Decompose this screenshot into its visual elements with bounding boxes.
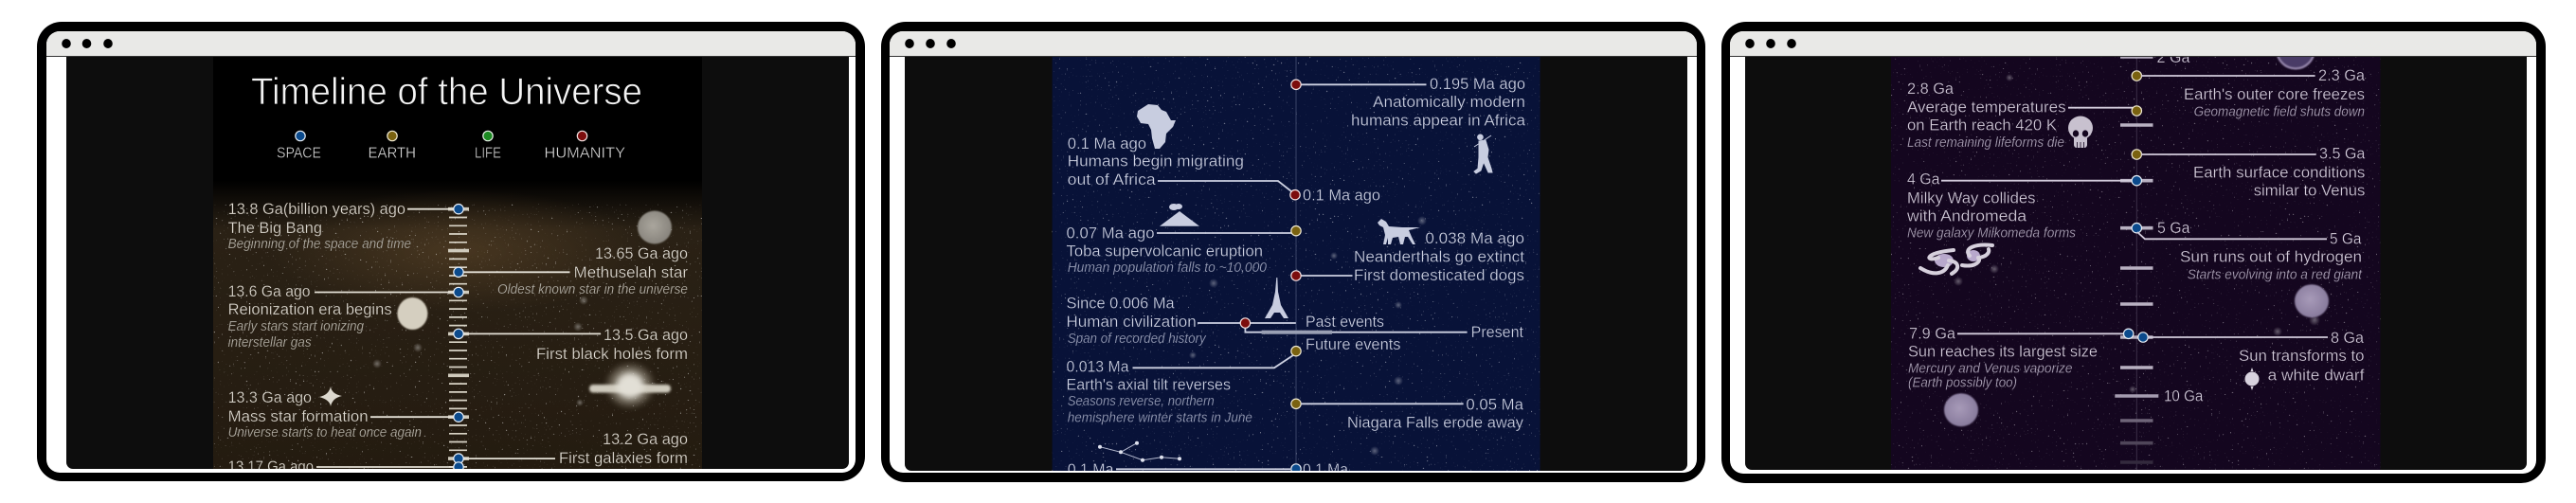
event: axial tilt: [1067, 347, 1301, 426]
event: Niagara Falls: Niagara Falls erode away: [1347, 414, 1523, 432]
legend: HUMANITY: [544, 146, 625, 162]
event: Reionization era: interstellar gas: [228, 335, 312, 350]
event: Sun runs out of hydrogen: Starts evolving into a red giant: [2188, 267, 2363, 282]
icon: Eiffel tower: [1265, 278, 1288, 318]
event: average temperatures: on Earth reach 420 K: [1907, 117, 2058, 135]
event: outer core freezes: Earth's outer core freezes: [2184, 85, 2365, 103]
event: outer core freezes: Geomagnetic field shuts down: [2194, 105, 2365, 120]
event: surface like Venus: 3.5 Ga: [2319, 144, 2366, 162]
icon: four-point star: [319, 386, 342, 406]
event: The Big Bang: Beginning of the space and time: [228, 237, 411, 252]
event: Sun runs out of hydrogen: 5 Ga: [2157, 219, 2190, 237]
planet: red giant Sun: [2295, 284, 2329, 317]
page screenshot 2: [905, 57, 1687, 478]
event: Reionization era: [228, 282, 463, 350]
event: average temperatures: Last remaining lifeforms die: [1907, 135, 2064, 151]
event: Neanderthals extinct and dogs: Neanderthals go extinct: [1354, 248, 1524, 266]
event: average temperatures: [1907, 80, 2141, 151]
event: modern humans: [1291, 75, 1526, 130]
timeline axis with tick marks: [448, 209, 469, 467]
event: Human civilization and present marker: Human civilization: [1067, 313, 1197, 331]
event: Human civilization and present marker: Future events: [1306, 335, 1400, 353]
event: Sun largest size: (Earth possibly too): [1908, 376, 2017, 391]
event: Milky Way collision: Milky Way collides: [1907, 189, 2035, 207]
event: Toba eruption: Toba supervolcanic eruption: [1067, 243, 1263, 260]
legend: SPACE: [277, 146, 321, 162]
event: migration out of Africa: 0.1 Ma ago: [1303, 187, 1380, 205]
icon: volcano: [1160, 204, 1199, 226]
icon: white dwarf star: [2245, 368, 2259, 390]
event: axial tilt: 0.013 Ma: [1067, 358, 1129, 376]
event: axial tilt: Earth's axial tilt reverses: [1067, 376, 1231, 394]
timeline axis: [1296, 57, 1297, 464]
event: migration out of Africa: [1068, 135, 1380, 205]
event: First galaxies: 13.2 Ga ago: [603, 430, 688, 448]
label: 2 Ga, clipped: 2 Ga: [2156, 48, 2190, 66]
timeline axis with tick marks: [2115, 57, 2158, 470]
planet: reionization body: [397, 297, 427, 330]
event: The Big Bang: [228, 200, 463, 252]
legend: EARTH: [368, 146, 416, 162]
event: Milky Way collision: 4 Ga: [1907, 170, 1940, 188]
window frame 3: [1721, 22, 2546, 483]
event: Toba eruption: Human population falls to ~10,000: [1068, 260, 1267, 276]
event: 13.17 Ga, clipped: [229, 460, 464, 469]
icon: dog: [1378, 219, 1420, 244]
event: migration out of Africa: out of Africa: [1068, 171, 1156, 189]
event: First galaxies: [453, 434, 688, 466]
event: Milky Way collision: with Andromeda: [1906, 207, 2027, 225]
title: Timeline of the Universe: [251, 71, 642, 113]
event: Reionization era: 13.6 Ga ago: [228, 282, 311, 300]
event: migration out of Africa: Humans begin migrating: [1068, 153, 1244, 171]
event: surface like Venus: [2132, 144, 2366, 200]
event: Human civilization and present marker: Past events: [1306, 313, 1384, 331]
page screenshot 1: [66, 57, 849, 476]
event: Methuselah star: Methuselah star: [574, 263, 688, 281]
planet: bloated Sun: [1944, 393, 1978, 426]
event: Mass star formation: 13.3 Ga ago: [228, 388, 312, 406]
event: First black holes: 13.5 Ga ago: [603, 326, 688, 344]
legend: LIFE: [475, 146, 501, 162]
planet: early moon-like body: [638, 210, 672, 244]
event: modern humans: humans appear in Africa: [1351, 112, 1526, 130]
event: Human civilization and present marker: Since 0.006 Ma: [1067, 295, 1175, 313]
event: Mass star formation: Mass star formation: [228, 407, 369, 425]
event: Sun largest size: Sun reaches its largest size: [1908, 343, 2098, 361]
event: Toba eruption: [1067, 225, 1301, 276]
event: Toba eruption: 0.07 Ma ago: [1067, 225, 1154, 243]
event: The Big Bang: The Big Bang: [228, 219, 322, 237]
event: Mass star formation: Universe starts to heat once again: [228, 425, 422, 440]
event: Methuselah star: Oldest known star in the universe: [497, 282, 688, 297]
event: Niagara Falls: [1290, 398, 1523, 431]
event: Sun becomes white dwarf: Sun transforms to: [2239, 347, 2365, 365]
event: Sun becomes white dwarf: a white dwarf: [2268, 367, 2365, 385]
event: axial tilt: hemisphere winter starts in June: [1068, 411, 1252, 426]
event: surface like Venus: Earth surface conditions: [2193, 163, 2365, 181]
icon: galaxy: [589, 365, 671, 406]
event: Neanderthals extinct and dogs: [1291, 229, 1524, 284]
legend: [277, 131, 625, 157]
event: Milky Way collision: [1906, 170, 2141, 242]
event: Mass star formation: [228, 388, 463, 440]
event: average temperatures: 2.8 Ga: [1907, 80, 1955, 98]
icon: skull: [2068, 116, 2093, 148]
page screenshot 3: [1745, 30, 2527, 470]
event: Reionization era: Reionization era begins: [228, 300, 392, 318]
window frame 2: [881, 22, 1705, 482]
window frame 1: [37, 22, 865, 481]
event: modern humans: 0.195 Ma ago: [1430, 75, 1525, 93]
event: Sun becomes white dwarf: [2138, 329, 2365, 385]
event: Niagara Falls: 0.05 Ma: [1466, 395, 1524, 413]
event: Sun becomes white dwarf: 8 Ga: [2331, 329, 2365, 347]
event: Methuselah star: 13.65 Ga ago: [595, 244, 688, 262]
event: Sun largest size: [1908, 324, 2134, 391]
event: modern humans: Anatomically modern: [1373, 93, 1525, 111]
event: outer core freezes: [2132, 66, 2366, 120]
event: Sun largest size: Mercury and Venus vaporize: [1908, 361, 2073, 376]
event: 13.17 Ga, clipped: 13.17 Ga ago: [228, 458, 314, 476]
icon: Africa: [1137, 104, 1176, 149]
event: Sun runs out of hydrogen: [2132, 219, 2363, 282]
event: axial tilt: Seasons reverse, northern: [1068, 394, 1215, 409]
event: 0.1 Ma future, clipped: 0.1 Ma: [1068, 460, 1114, 478]
icon: colliding spiral galaxies: [1920, 245, 1992, 274]
panel: browser window 3, far future: [1721, 22, 2546, 483]
event: Neanderthals extinct and dogs: 0.038 Ma ago: [1425, 229, 1524, 247]
event: outer core freezes: 2.3 Ga: [2318, 66, 2366, 84]
event: Human civilization and present marker: Present: [1471, 323, 1523, 341]
event: First black holes: First black holes form: [536, 345, 688, 363]
event: Sun largest size: 7.9 Ga: [1909, 324, 1956, 342]
panel: browser window 2, human era: [881, 22, 1705, 482]
event: Methuselah star: [453, 248, 688, 294]
event: Reionization era: Early stars start ionizing: [228, 319, 364, 334]
event: 0.1 Ma future, clipped: 0.1 Ma: [1303, 460, 1348, 478]
event: Neanderthals extinct and dogs: First domesticated dogs: [1354, 266, 1524, 284]
planet: purple, clipped: [2276, 57, 2315, 70]
event: 0.1 Ma future, clipped: [1068, 463, 1347, 471]
icon: constellation: [1098, 441, 1181, 462]
event: average temperatures: Average temperatures: [1907, 98, 2066, 116]
event: Sun runs out of hydrogen: Sun runs out of hydrogen: [2180, 248, 2362, 266]
event: Human civilization and present marker: Span of recorded history: [1068, 332, 1206, 347]
panel: browser window 1, start of the timeline: [37, 22, 865, 481]
event: migration out of Africa: 0.1 Ma ago: [1068, 135, 1146, 153]
event: surface like Venus: similar to Venus: [2254, 182, 2365, 200]
event: Milky Way collision: New galaxy Milkomeda forms: [1907, 226, 2076, 242]
event: First galaxies: First galaxies form: [559, 449, 688, 467]
event: Human civilization and present marker: [1067, 297, 1523, 350]
icon: walking human: [1474, 135, 1492, 173]
event: The Big Bang: 13.8 Ga(billion years) ago: [228, 200, 405, 218]
label: 10 Ga: 10 Ga: [2164, 386, 2204, 404]
event: Sun runs out of hydrogen: 5 Ga: [2330, 229, 2362, 247]
event: First black holes: [453, 328, 688, 359]
